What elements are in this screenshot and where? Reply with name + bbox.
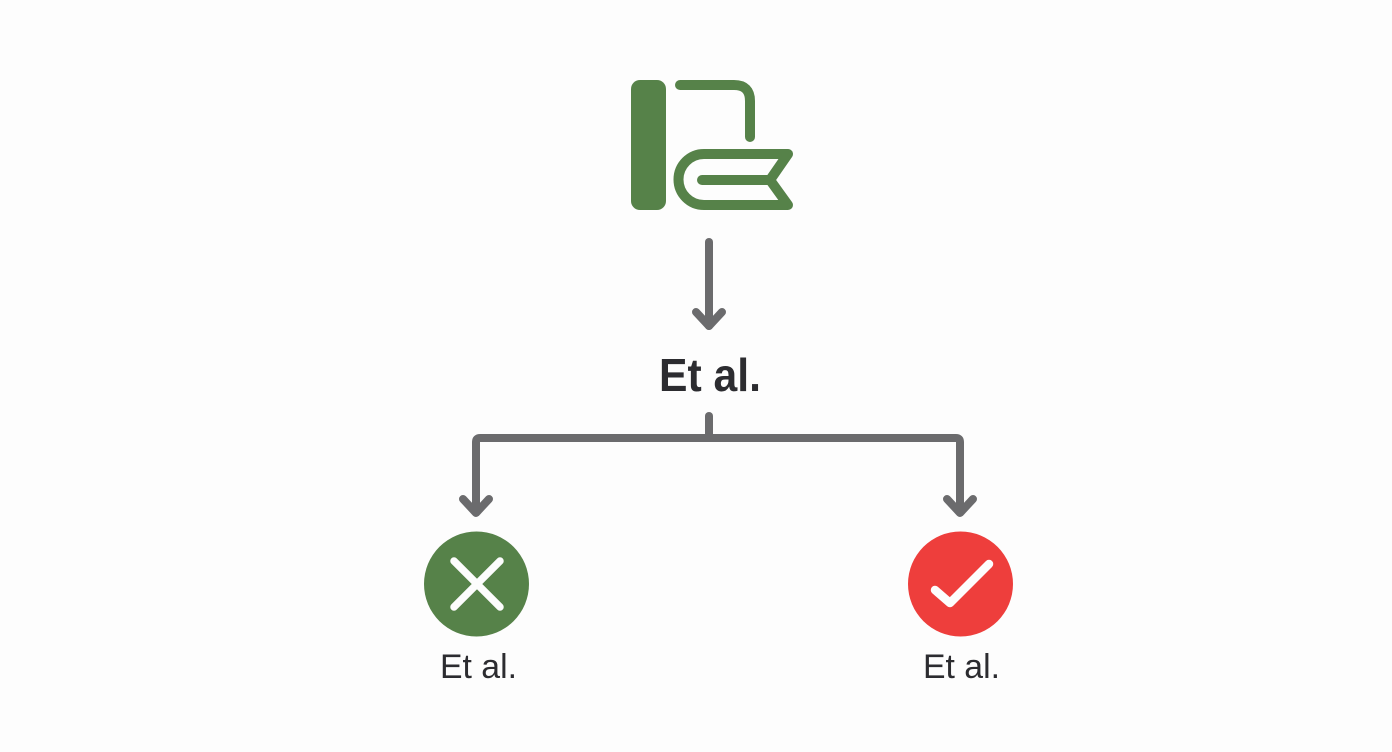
arrow: book to main term — [696, 242, 722, 326]
label: right Et al.: Et al. — [923, 648, 1000, 686]
icon: green book — [631, 80, 788, 210]
heading: Et al.: Et al. — [659, 349, 761, 401]
icon: red circle with check — [908, 532, 1013, 636]
label: left Et al.: Et al. — [440, 648, 517, 686]
branching connector with arrows — [463, 416, 973, 513]
icon: green circle with cross — [424, 532, 529, 636]
